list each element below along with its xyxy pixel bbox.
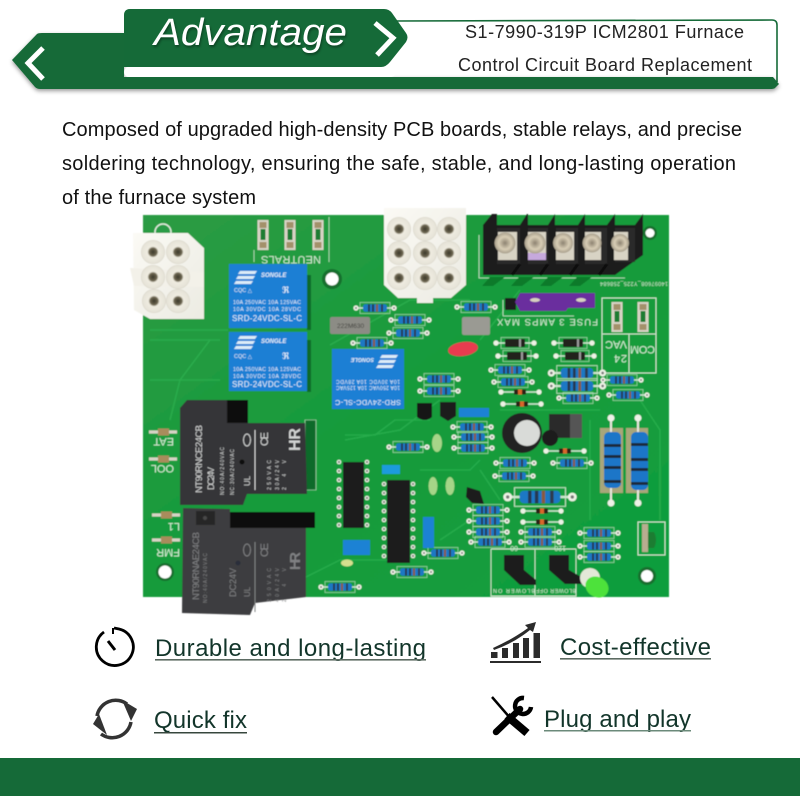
- 24 VAC / COM terminals: VAC: [605, 338, 627, 350]
- underline: [155, 659, 426, 661]
- blue relay K4: SRD-24VDC-SL-C: [232, 314, 302, 323]
- description text: [62, 119, 742, 209]
- icon: growth chart: [490, 622, 541, 663]
- black relay bottom: [182, 508, 315, 615]
- black relay top: NC:30A/240VAC: [230, 449, 236, 495]
- blower jumpers: 60: [510, 544, 518, 551]
- blue relay K4: [229, 264, 311, 330]
- fuse: [496, 293, 598, 327]
- electrolytic capacitor: [502, 413, 542, 453]
- underline: [154, 732, 247, 734]
- black relay top: UL: [243, 475, 252, 486]
- black relay bottom: NO:40A/240VAC: [203, 553, 209, 603]
- black relay top: DC24V: [206, 467, 216, 490]
- label: plug and play: Plug and play: [544, 706, 691, 733]
- screw terminal block: [479, 214, 668, 286]
- capacitors C11 and C3: 222M630: [337, 323, 364, 330]
- resistors: [318, 302, 650, 592]
- banner title tab: [124, 9, 408, 67]
- screw terminal block: 14097608_Y225_258684: [600, 280, 668, 286]
- mounting holes: [155, 224, 657, 585]
- power resistors: [600, 414, 648, 506]
- black relay top: NT90RNCE24CB: [194, 425, 205, 493]
- pcb substrate: [143, 215, 669, 597]
- feature: quick fix: [93, 700, 247, 738]
- left spade terminals and labels: FMR: [156, 546, 180, 558]
- description text: of the furnace system: [62, 187, 256, 209]
- label: durable: Durable and long-lasting: [155, 635, 426, 662]
- icon: right chevron: [375, 23, 393, 55]
- icon: stopwatch: [96, 628, 133, 666]
- blue relay K3 rotated: 10A 30VDC 10A 28VDC: [336, 378, 400, 384]
- title: Advantage: [152, 12, 347, 54]
- status LED: [580, 568, 612, 602]
- left spade terminals and labels: L1: [168, 520, 180, 532]
- blue relay K1: SRD-24VDC-SL-C: [232, 380, 302, 389]
- feature: cost-effective: [490, 622, 711, 663]
- black relay top: 250VAC: [267, 460, 273, 490]
- label: cost-effective: Cost-effective: [560, 634, 711, 661]
- left spade terminals and labels: [149, 428, 180, 558]
- left spade terminals and labels: EAT: [153, 435, 174, 447]
- black relay top: NO:40A/240VAC: [220, 447, 226, 495]
- blower jumpers: BLOWER OFF: [535, 587, 576, 593]
- feature: plug and play: [492, 697, 691, 733]
- icon: wrench and screwdriver: [492, 697, 531, 733]
- blue relay K1: ℜ: [282, 351, 290, 361]
- banner base ribbon with left arrow: [12, 33, 779, 89]
- connector P4: [130, 233, 204, 319]
- blue relay K4: 10A 30VDC 10A 28VDC: [233, 307, 301, 313]
- black relay bottom: NT90RNAE24CB: [191, 532, 202, 600]
- diodes: [493, 338, 597, 525]
- white pill under tab: [124, 67, 396, 77]
- product name line 1: S1-7990-319P ICM2801 Furnace: [465, 22, 744, 42]
- black relay bottom: 40A/24V: [275, 567, 281, 602]
- underline: [560, 658, 711, 660]
- label: quick fix: Quick fix: [154, 707, 247, 734]
- blue relay K4: 10A 250VAC 10A 125VAC: [233, 300, 301, 306]
- black relay bottom: 24V: [282, 567, 288, 602]
- blue relay K1: 10A 30VDC 10A 28VDC: [233, 374, 301, 380]
- feature: durable: [96, 628, 426, 666]
- black relay top: 24V: [282, 459, 288, 490]
- black relay top: 30A/24V: [275, 459, 281, 490]
- blower jumpers: BLOWER ON: [493, 587, 535, 593]
- blue relay K3 rotated: 10A 250VAC 10A 125VAC: [336, 384, 400, 390]
- 24 VAC / COM terminals: [602, 298, 656, 373]
- circuit board photo: [130, 208, 669, 615]
- blue relay K3 rotated: [332, 349, 404, 409]
- icon: left chevron: [28, 48, 43, 79]
- underline: [544, 730, 691, 732]
- integrated circuits: [337, 460, 415, 563]
- black relay bottom: HR: [287, 552, 304, 570]
- neutral terminals: [254, 217, 329, 265]
- neutral terminals: NEUTRALS: [261, 253, 321, 265]
- connector P1: [384, 208, 466, 303]
- film and ceramic capacitors: [341, 408, 489, 566]
- black relay top: CE: [259, 432, 271, 446]
- blue relay K3 rotated: SRD-24VDC-SL-C: [334, 398, 401, 407]
- 24 VAC / COM terminals: 24: [614, 352, 627, 364]
- black relay bottom: CE: [259, 543, 271, 557]
- transistors: [417, 402, 582, 504]
- blue relay K3 rotated: SONGLE: [350, 356, 374, 362]
- banner white box outline: [395, 20, 777, 82]
- black relay bottom: UL: [243, 586, 252, 597]
- left spade terminals and labels: OOL: [151, 462, 174, 474]
- varistor MOV1: [447, 340, 479, 358]
- blower jumpers: [491, 544, 583, 596]
- blue relay K1: [229, 332, 311, 392]
- 24 VAC / COM terminals: COM: [630, 343, 655, 355]
- blue relay K4: CQC △: [234, 288, 253, 294]
- black relay top: [180, 400, 316, 505]
- black relay top: HR: [287, 428, 304, 451]
- black relay bottom: 250VAC: [267, 568, 273, 602]
- footer band: [0, 758, 800, 796]
- header banner: [12, 9, 779, 89]
- fuse: FUSE 3 AMPS MAX: [496, 316, 598, 327]
- blue relay K4: ℜ: [282, 285, 290, 295]
- copper traces: [150, 290, 660, 580]
- product name line 2: Control Circuit Board Replacement: [458, 55, 752, 75]
- blower jumpers: 120: [554, 544, 566, 551]
- description text: Composed of upgraded high-density PCB boards, stable relays, and precise: [62, 119, 742, 141]
- right terminal: [638, 522, 665, 555]
- blue relay K1: SONGLE: [261, 339, 287, 345]
- blue relay K1: CQC △: [234, 354, 253, 360]
- icon: refresh arrows: [93, 700, 137, 738]
- description text: soldering technology, ensuring the safe, stable, and long-lasting operation: [62, 153, 736, 175]
- capacitors C11 and C3: [330, 317, 490, 335]
- blue relay K1: 10A 250VAC 10A 125VAC: [233, 367, 301, 373]
- blue relay K4: SONGLE: [261, 273, 287, 279]
- black relay bottom: DC24V: [228, 568, 238, 597]
